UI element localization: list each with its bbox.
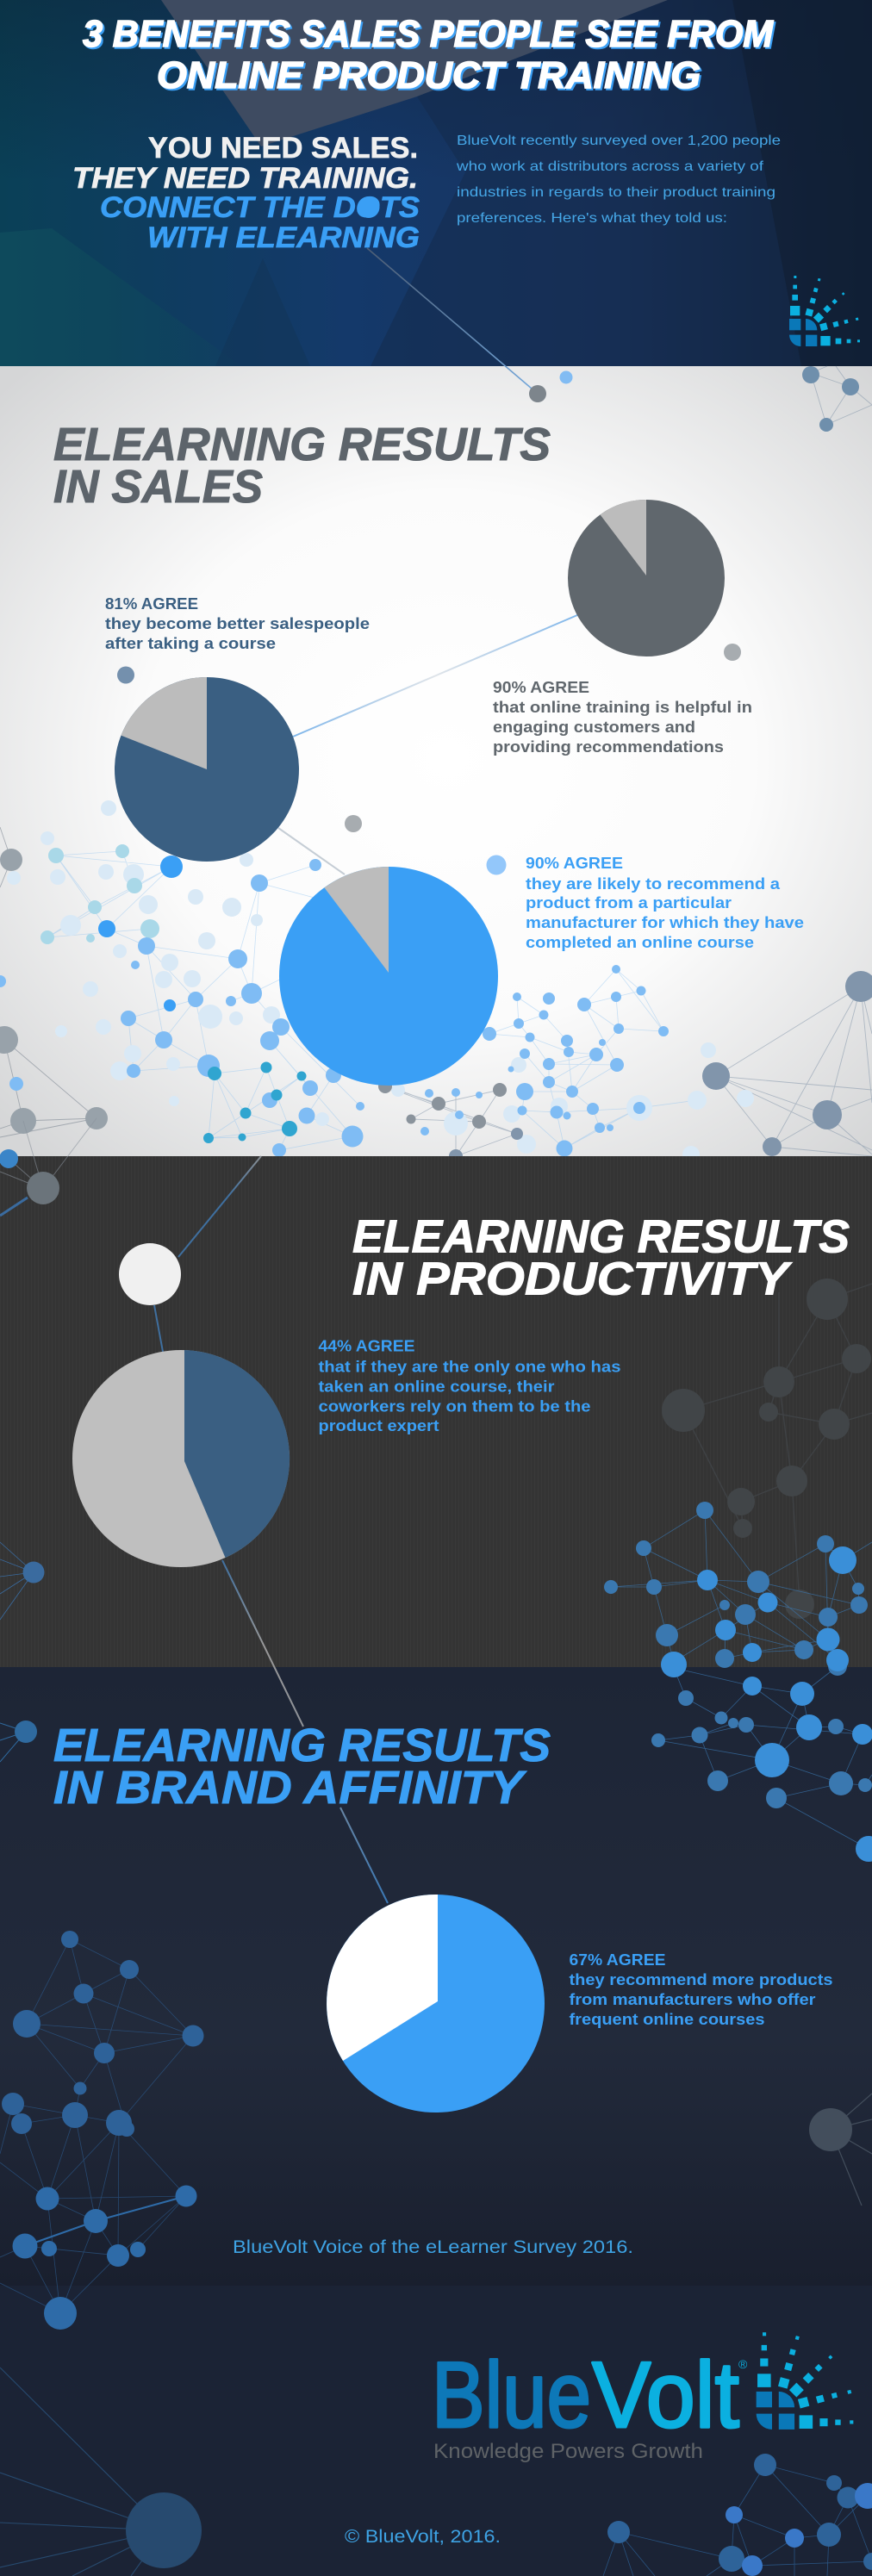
logo: BlueVolt: Knowledge Powers Growth bbox=[433, 2440, 703, 2463]
panel: footer background bbox=[0, 2286, 872, 2576]
network: sales section bbox=[0, 366, 872, 1163]
network: faint productivity nodes bbox=[662, 1279, 872, 1619]
stat: 90% agree grey: engaging customers and bbox=[493, 718, 695, 736]
network: node left of productivity pie bbox=[0, 1542, 45, 1620]
logo: BlueVolt: ® bbox=[738, 2357, 748, 2371]
intro paragraph: preferences. Here's what they told us: bbox=[457, 211, 727, 226]
dot: steel blue node above pie bbox=[117, 667, 134, 684]
icon: BlueVolt mark small bbox=[789, 276, 860, 346]
heading: elearning results in sales bbox=[53, 419, 551, 513]
network: blue cluster right bbox=[604, 1502, 872, 1862]
heading: elearning results in brand affinity bbox=[53, 1720, 551, 1814]
stat: 90% agree grey: providing recommendations bbox=[493, 737, 724, 756]
heading: elearning results in sales: IN SALES bbox=[53, 461, 263, 513]
connector: productivity pie to brand pie bbox=[222, 1560, 388, 1903]
subheading: you need sales: WITH ELEARNING bbox=[147, 221, 420, 254]
stat: 90% agree blue bbox=[526, 854, 804, 951]
copyright: © BlueVolt, 2016. bbox=[345, 2527, 501, 2547]
stat: 44% agree: product expert bbox=[319, 1416, 439, 1434]
dot: grey node mid bbox=[345, 815, 362, 832]
stat: 90% agree blue: they are likely to recommend a bbox=[526, 874, 781, 893]
panel: header background bbox=[0, 0, 872, 366]
connector: header to sales dot bbox=[367, 248, 538, 394]
stat: 67% agree: 67% AGREE bbox=[569, 1951, 665, 1969]
connector: pie 81 to blue pie bbox=[278, 828, 345, 874]
heading: elearning results in brand affinity: ELEARNING RESULTS bbox=[53, 1720, 551, 1771]
network: large footer node bbox=[0, 2368, 202, 2576]
title bbox=[83, 13, 774, 96]
logo: BlueVolt: Blue bbox=[432, 2343, 591, 2448]
dot: grey connector node bbox=[529, 385, 546, 402]
pie chart: 81% agree bbox=[115, 677, 299, 862]
node: grey lower right of brand panel bbox=[809, 2094, 872, 2206]
subheading: you need sales: THEY NEED TRAINING. bbox=[72, 162, 418, 195]
stat: 81% agree: after taking a course bbox=[105, 634, 276, 652]
subheading: you need sales: YOU NEED SALES. bbox=[148, 132, 418, 165]
heading: elearning results in productivity: IN PRODUCTIVITY bbox=[352, 1253, 793, 1304]
stat: 81% agree: 81% AGREE bbox=[105, 594, 198, 613]
heading: elearning results in brand affinity: IN BRAND AFFINITY bbox=[53, 1762, 527, 1814]
node: left of brand heading bbox=[0, 1720, 37, 1762]
dot: grey node right of pie bbox=[724, 644, 741, 661]
panel: brand affinity background bbox=[0, 1667, 872, 2286]
pie chart: 44% agree bbox=[72, 1350, 290, 1567]
pie chart: 90% agree grey bbox=[568, 500, 725, 656]
intro paragraph: BlueVolt recently surveyed over 1,200 people bbox=[457, 134, 781, 148]
stat: 90% agree grey: 90% AGREE bbox=[493, 678, 589, 696]
pie chart: 67% agree bbox=[327, 1895, 545, 2112]
stat: 44% agree: taken an online course, their bbox=[319, 1377, 555, 1396]
panel: productivity background bbox=[0, 1156, 872, 1667]
stat: 81% agree: they become better salespeople bbox=[105, 614, 370, 632]
stat: 81% agree bbox=[105, 594, 370, 652]
network: footer lower right cluster bbox=[603, 2454, 872, 2576]
logo: BlueVolt bbox=[432, 2332, 853, 2463]
intro paragraph: industries in regards to their product training bbox=[457, 185, 775, 200]
logo: BlueVolt: Volt bbox=[592, 2343, 739, 2448]
intro paragraph bbox=[456, 134, 781, 226]
dot: light blue node bbox=[560, 370, 572, 384]
node: large white dot bbox=[119, 1243, 181, 1305]
connector: pie 81 to pie 90 bbox=[293, 615, 577, 737]
stat: 90% agree blue: completed an online course bbox=[526, 933, 754, 951]
source note: BlueVolt Voice of the eLearner Survey 2016. bbox=[233, 2237, 633, 2257]
subheading: you need sales bbox=[72, 132, 420, 254]
stat: 67% agree: from manufacturers who offer bbox=[569, 1990, 815, 2008]
stat: 67% agree bbox=[569, 1951, 832, 2028]
heading: elearning results in sales: ELEARNING RESULTS bbox=[53, 419, 551, 470]
subheading: you need sales: CONNECT THE DOTS bbox=[100, 191, 420, 224]
connector: white node to productivity pie bbox=[154, 1305, 163, 1352]
heading: elearning results in productivity: ELEARNING RESULTS bbox=[352, 1211, 850, 1263]
intro paragraph: who work at distributors across a variety of bbox=[456, 159, 764, 174]
stat: 67% agree: frequent online courses bbox=[569, 2010, 765, 2028]
title: ONLINE PRODUCT TRAINING bbox=[157, 54, 701, 96]
stat: 67% agree: they recommend more products bbox=[569, 1970, 832, 1988]
stat: 44% agree bbox=[319, 1337, 620, 1434]
stat: 90% agree grey: that online training is helpful in bbox=[493, 698, 752, 716]
network: left brand cluster bbox=[0, 1931, 203, 2330]
stat: 90% agree blue: manufacturer for which they have bbox=[526, 913, 804, 931]
panel: sales background bbox=[0, 366, 872, 1156]
stat: 44% agree: 44% AGREE bbox=[319, 1337, 415, 1354]
stat: 90% agree blue: product from a particular bbox=[526, 893, 732, 912]
heading: elearning results in productivity bbox=[352, 1211, 850, 1304]
stat: 90% agree blue: 90% AGREE bbox=[526, 854, 623, 872]
network: nodes crossing sales and productivity bbox=[0, 1118, 97, 1216]
connector: blue pie to productivity node bbox=[178, 1156, 261, 1257]
pie chart: 90% agree blue bbox=[279, 867, 498, 1086]
stat: 44% agree: coworkers rely on them to be the bbox=[319, 1397, 591, 1415]
stat: 90% agree grey bbox=[493, 678, 752, 756]
dot: light blue node beside label bbox=[486, 855, 507, 875]
title: 3 BENEFITS SALES PEOPLE SEE FROM bbox=[83, 13, 774, 55]
stat: 44% agree: that if they are the only one who has bbox=[319, 1358, 620, 1375]
